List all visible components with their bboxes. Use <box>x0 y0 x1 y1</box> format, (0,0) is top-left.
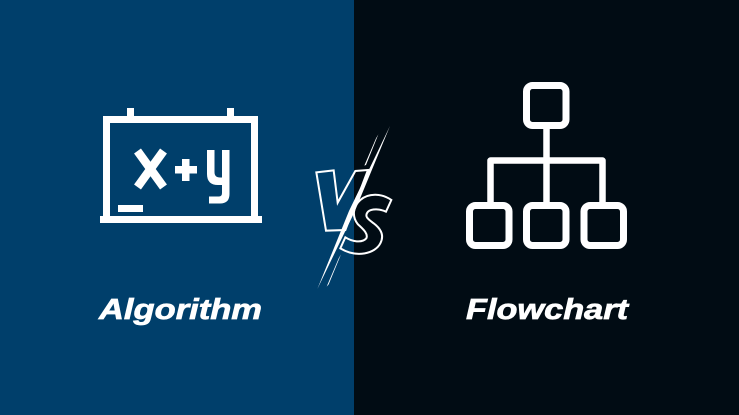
icon: hierarchy flowchart <box>470 86 624 246</box>
letter S <box>340 195 391 254</box>
icon: versus mark <box>316 126 391 289</box>
label: Algorithm: Algorithm <box>98 294 262 326</box>
panel: algorithm side <box>0 0 354 415</box>
panel: flowchart side <box>354 0 739 415</box>
icon: chalkboard with x + y <box>100 108 262 223</box>
letter V <box>316 170 368 231</box>
label: Flowchart: Flowchart <box>466 294 630 326</box>
slash <box>317 126 390 289</box>
